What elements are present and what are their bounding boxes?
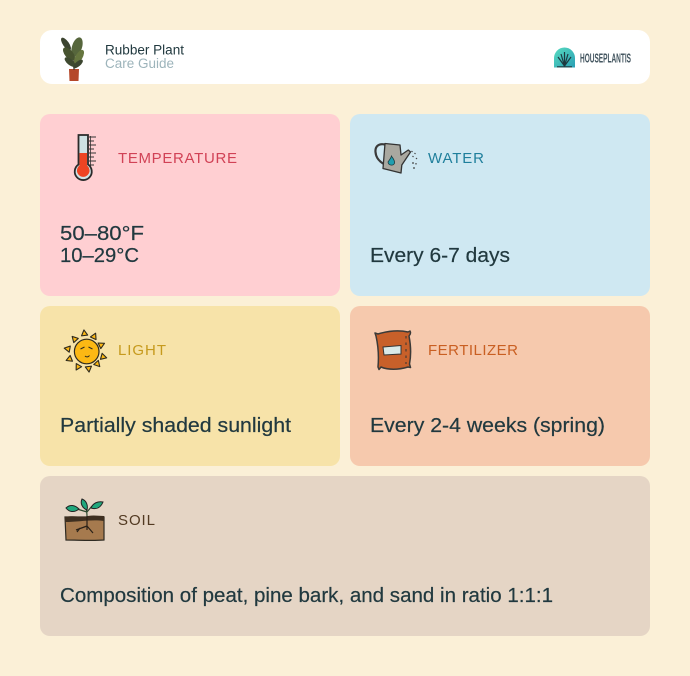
icon: soil with sprout	[65, 499, 104, 540]
panel: soil	[40, 476, 650, 636]
heading: temperature: TEMPERATURE	[118, 150, 237, 167]
panel: light	[40, 306, 340, 466]
value: water: Every 6-7 days	[370, 244, 510, 267]
header bar	[40, 30, 650, 84]
icon: sun	[64, 330, 108, 372]
logo: Houseplantis	[554, 48, 631, 68]
heading: fertilizer: FERTILIZER	[428, 342, 518, 359]
value: light: Partially shaded sunlight	[60, 414, 291, 437]
values: temperature: 10–29°C	[60, 244, 139, 267]
icon: watering can	[375, 144, 417, 173]
panel: water	[350, 114, 650, 296]
values: temperature	[60, 222, 144, 267]
icon: rubber plant	[59, 36, 86, 81]
title: Rubber Plant	[105, 42, 184, 58]
icon: fertilizer bag	[375, 331, 411, 370]
heading: soil: SOIL	[118, 512, 155, 529]
icon: thermometer	[75, 135, 96, 180]
heading: light: LIGHT	[118, 342, 166, 359]
panel: fertilizer	[350, 306, 650, 466]
values: temperature: 50–80°F	[60, 222, 144, 245]
value: fertilizer: Every 2-4 weeks (spring)	[370, 414, 605, 437]
heading: water: WATER	[428, 150, 484, 167]
subtitle: Care Guide	[105, 56, 174, 71]
value: soil: Composition of peat, pine bark, and sand in ratio 1:1:1	[60, 584, 553, 607]
logo: Houseplantis: HOUSEPLANTIS	[580, 50, 631, 66]
panel: temperature	[40, 114, 340, 296]
